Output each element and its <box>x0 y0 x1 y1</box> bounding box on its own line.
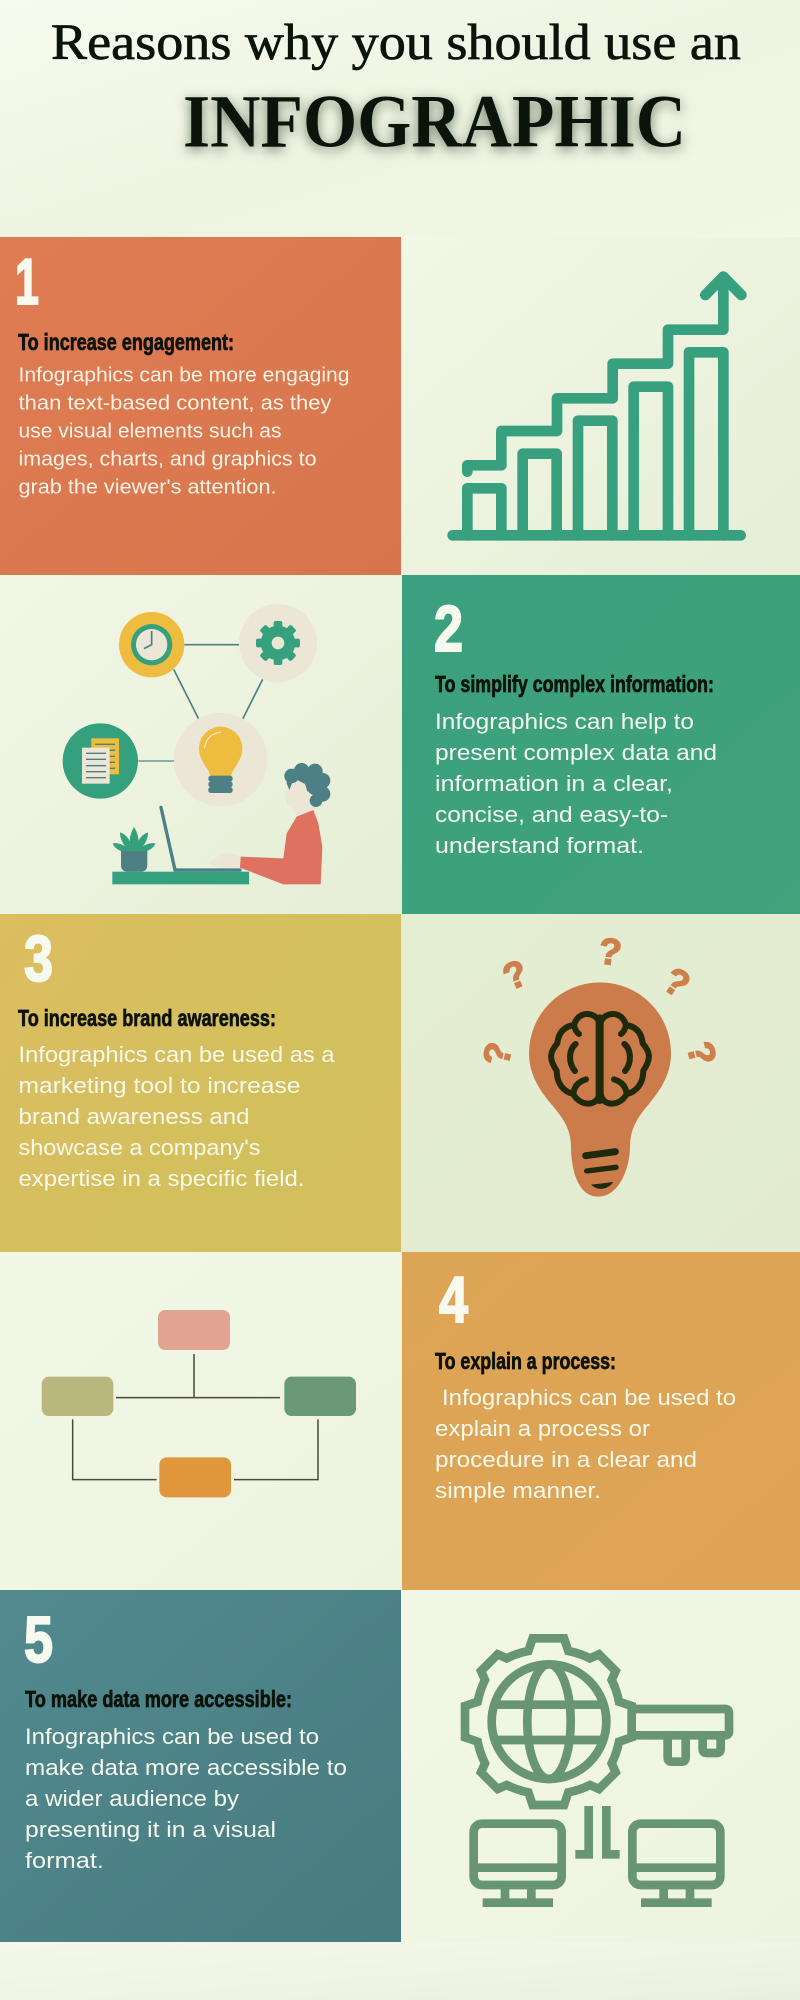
body text: a wider audience by <box>25 1786 239 1811</box>
title line 1: Reasons why you should use an <box>51 15 741 71</box>
icon: rising bar chart with arrow <box>453 277 741 535</box>
icon: documents <box>63 723 138 799</box>
body text: present complex data and <box>435 740 717 765</box>
body text <box>18 1042 335 1191</box>
heading: To make data more accessible: <box>25 1686 292 1712</box>
body text: Infographics can be more engaging <box>18 364 350 386</box>
desk <box>112 872 249 884</box>
body text: explain a process or <box>435 1416 650 1441</box>
heading: To increase engagement: <box>18 329 234 355</box>
panel 2 background <box>402 575 800 914</box>
body text: use visual elements such as <box>18 420 282 442</box>
body text: Infographics can be used as a <box>18 1042 335 1067</box>
question marks: ? <box>474 1038 520 1069</box>
question marks: ? <box>596 929 624 974</box>
body text: marketing tool to increase <box>18 1073 300 1098</box>
question marks: ? <box>679 1037 725 1070</box>
body text: expertise in a specific field. <box>18 1166 304 1191</box>
icon: clock <box>119 612 184 677</box>
gear outline <box>465 1638 632 1805</box>
box: orange <box>159 1457 231 1497</box>
body text: information in a clear, <box>435 771 673 796</box>
box: olive <box>42 1377 113 1416</box>
panel 1: to increase engagement <box>0 237 401 575</box>
panel 3: to increase brand awareness <box>0 914 401 1252</box>
computer right <box>632 1824 720 1903</box>
panel: network illustration background <box>0 575 402 914</box>
body text: than text-based content, as they <box>18 392 332 414</box>
body text: Infographics can be used to <box>442 1385 736 1410</box>
person <box>208 763 330 884</box>
connector lines <box>138 645 263 761</box>
panel: brain bulb background <box>401 914 800 1252</box>
body text: brand awareness and <box>18 1104 249 1129</box>
body text <box>25 1724 347 1873</box>
body text <box>435 709 717 858</box>
brain outline <box>551 1014 649 1104</box>
icon: potted plant <box>113 827 155 872</box>
heading: To simplify complex information: <box>435 671 714 697</box>
page background <box>0 0 800 237</box>
panel: network key illustration background <box>401 1590 800 1942</box>
panel 1 background <box>0 237 401 575</box>
panel 2: to simplify complex information <box>402 575 800 914</box>
illustration: person with idea network <box>63 604 330 884</box>
panel: flow diagram background <box>0 1252 402 1590</box>
body text <box>18 364 350 498</box>
number 1: 1 <box>15 245 39 318</box>
title <box>51 15 741 164</box>
panel 4 background <box>402 1252 800 1590</box>
title line 2: INFOGRAPHIC <box>183 80 686 164</box>
body text: procedure in a clear and <box>435 1447 697 1472</box>
flow diagram <box>42 1310 356 1497</box>
body text: Infographics can be used to <box>25 1724 319 1749</box>
globe <box>492 1664 606 1779</box>
bottom strip background <box>0 1942 800 2000</box>
body text: Infographics can help to <box>435 709 694 734</box>
panel 3 background <box>0 914 401 1252</box>
connector lines <box>73 1354 318 1480</box>
network connector <box>575 1806 620 1854</box>
body text: understand format. <box>435 833 644 858</box>
body text: grab the viewer's attention. <box>18 476 276 498</box>
body text <box>435 1385 736 1503</box>
body text: images, charts, and graphics to <box>18 448 316 470</box>
number 2: 2 <box>434 592 463 665</box>
laptop <box>161 807 240 870</box>
body text: presenting it in a visual <box>25 1817 276 1842</box>
key <box>632 1709 729 1762</box>
icon: light bulb <box>174 713 267 806</box>
body text: format. <box>25 1848 104 1873</box>
question marks: ? <box>497 951 534 998</box>
number 3: 3 <box>24 922 53 995</box>
box: pink <box>158 1310 230 1350</box>
box: green <box>284 1377 356 1416</box>
computer left <box>474 1824 562 1903</box>
number 4: 4 <box>439 1263 468 1336</box>
icon: brain light bulb with question marks <box>474 929 725 1197</box>
question marks <box>474 929 725 1070</box>
body text: simple manner. <box>435 1478 601 1503</box>
question marks: ? <box>656 958 698 1006</box>
heading: To explain a process: <box>435 1348 616 1374</box>
body text: concise, and easy-to- <box>435 802 668 827</box>
number 5: 5 <box>24 1603 53 1676</box>
panel 4: to explain a process <box>402 1252 800 1590</box>
body text: make data more accessible to <box>25 1755 347 1780</box>
panel 5 background <box>0 1590 401 1942</box>
panel 5: to make data more accessible <box>0 1590 401 1942</box>
bulb base stripes <box>586 1152 616 1189</box>
panel: chart illustration background <box>401 237 800 575</box>
bulb shape <box>529 982 671 1197</box>
body text: showcase a company's <box>18 1135 260 1160</box>
heading: To increase brand awareness: <box>18 1005 276 1031</box>
icon: gear <box>239 604 317 682</box>
icon: global key and computers <box>465 1638 729 1903</box>
